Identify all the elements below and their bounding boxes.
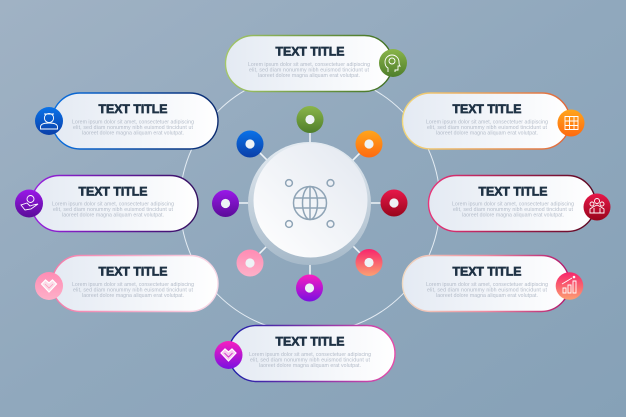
text block: laoreet dolore magna aliquam erat volutpat. [82, 130, 184, 136]
text block: laoreet dolore magna aliquam erat volutpat. [436, 130, 538, 136]
text block: elit, sed diam nonummy nibh euismod tincidunt ut [73, 288, 194, 294]
heading: TEXT TITLE [452, 102, 522, 116]
text block: elit, sed diam nonummy nibh euismod tincidunt ut [427, 125, 548, 131]
icon: bar chart [556, 272, 583, 300]
panel: coral [402, 256, 583, 312]
node: red [380, 190, 408, 216]
icon: globe [286, 180, 334, 227]
node: magenta [296, 274, 323, 302]
connecting ring [180, 73, 440, 333]
icon: handshake [35, 272, 63, 300]
panel: orange [402, 93, 584, 149]
text block: elit, sed diam nonummy nibh euismod tincidunt ut [249, 68, 370, 74]
heading: TEXT TITLE [78, 184, 148, 198]
panel: pink [35, 256, 218, 312]
text block: laoreet dolore magna aliquam erat volutpat. [82, 293, 184, 299]
node: orange [356, 130, 382, 158]
heading: TEXT TITLE [98, 264, 168, 278]
text block [426, 282, 548, 299]
icon: grid [558, 110, 584, 136]
panel: blue [35, 93, 218, 149]
text block [426, 120, 548, 136]
heading: TEXT TITLE [452, 264, 522, 278]
text block: Lorem ipsum dolor sit amet, consectetuer adipiscing [72, 282, 194, 288]
text block: Lorem ipsum dolor sit amet, consectetuer adipiscing [426, 282, 548, 288]
text block: elit, sed diam nonummy nibh euismod tincidunt ut [250, 358, 371, 364]
panel: purple [15, 176, 198, 232]
icon: person [35, 107, 63, 135]
panel: magenta [214, 326, 395, 382]
text block: laoreet dolore magna aliquam erat volutpat. [258, 73, 360, 79]
text block: elit, sed diam nonummy nibh euismod tincidunt ut [453, 207, 574, 213]
heading: TEXT TITLE [276, 44, 344, 58]
text block [248, 62, 370, 79]
node: green [296, 106, 324, 133]
icon: head with dollar [379, 49, 407, 77]
text block: Lorem ipsum dolor sit amet, consectetuer adipiscing [452, 202, 574, 208]
panel: top green [226, 36, 407, 92]
node: coral [356, 249, 382, 276]
text block [72, 120, 194, 136]
text block: Lorem ipsum dolor sit amet, consectetuer adipiscing [249, 352, 371, 358]
text block [52, 202, 174, 218]
text block: laoreet dolore magna aliquam erat volutpat. [62, 212, 164, 218]
node: blue [236, 130, 264, 158]
node: purple [212, 190, 239, 217]
text block [249, 352, 371, 369]
center hub spokes [226, 119, 394, 288]
text block: Lorem ipsum dolor sit amet, consectetuer adipiscing [72, 120, 194, 126]
icon: handshake [214, 341, 242, 369]
heading: TEXT TITLE [276, 334, 344, 348]
central hub [248, 142, 371, 265]
panel: red [428, 176, 610, 232]
heading: TEXT TITLE [98, 102, 168, 116]
node: pink [236, 250, 264, 276]
text block: elit, sed diam nonummy nibh euismod tincidunt ut [53, 207, 174, 213]
text block: Lorem ipsum dolor sit amet, consectetuer adipiscing [52, 202, 174, 208]
text block: elit, sed diam nonummy nibh euismod tincidunt ut [427, 288, 548, 294]
text block [452, 202, 574, 218]
text block [72, 282, 194, 299]
text block: laoreet dolore magna aliquam erat volutpat. [259, 363, 361, 369]
text block: Lorem ipsum dolor sit amet, consectetuer adipiscing [248, 62, 370, 68]
text block: laoreet dolore magna aliquam erat volutpat. [462, 212, 564, 218]
text block: laoreet dolore magna aliquam erat volutpat. [436, 293, 538, 299]
icon: team [584, 194, 610, 220]
icon: hand with money [15, 190, 43, 218]
text block: Lorem ipsum dolor sit amet, consectetuer adipiscing [426, 120, 548, 126]
heading: TEXT TITLE [478, 184, 548, 198]
text block: elit, sed diam nonummy nibh euismod tincidunt ut [73, 125, 194, 131]
